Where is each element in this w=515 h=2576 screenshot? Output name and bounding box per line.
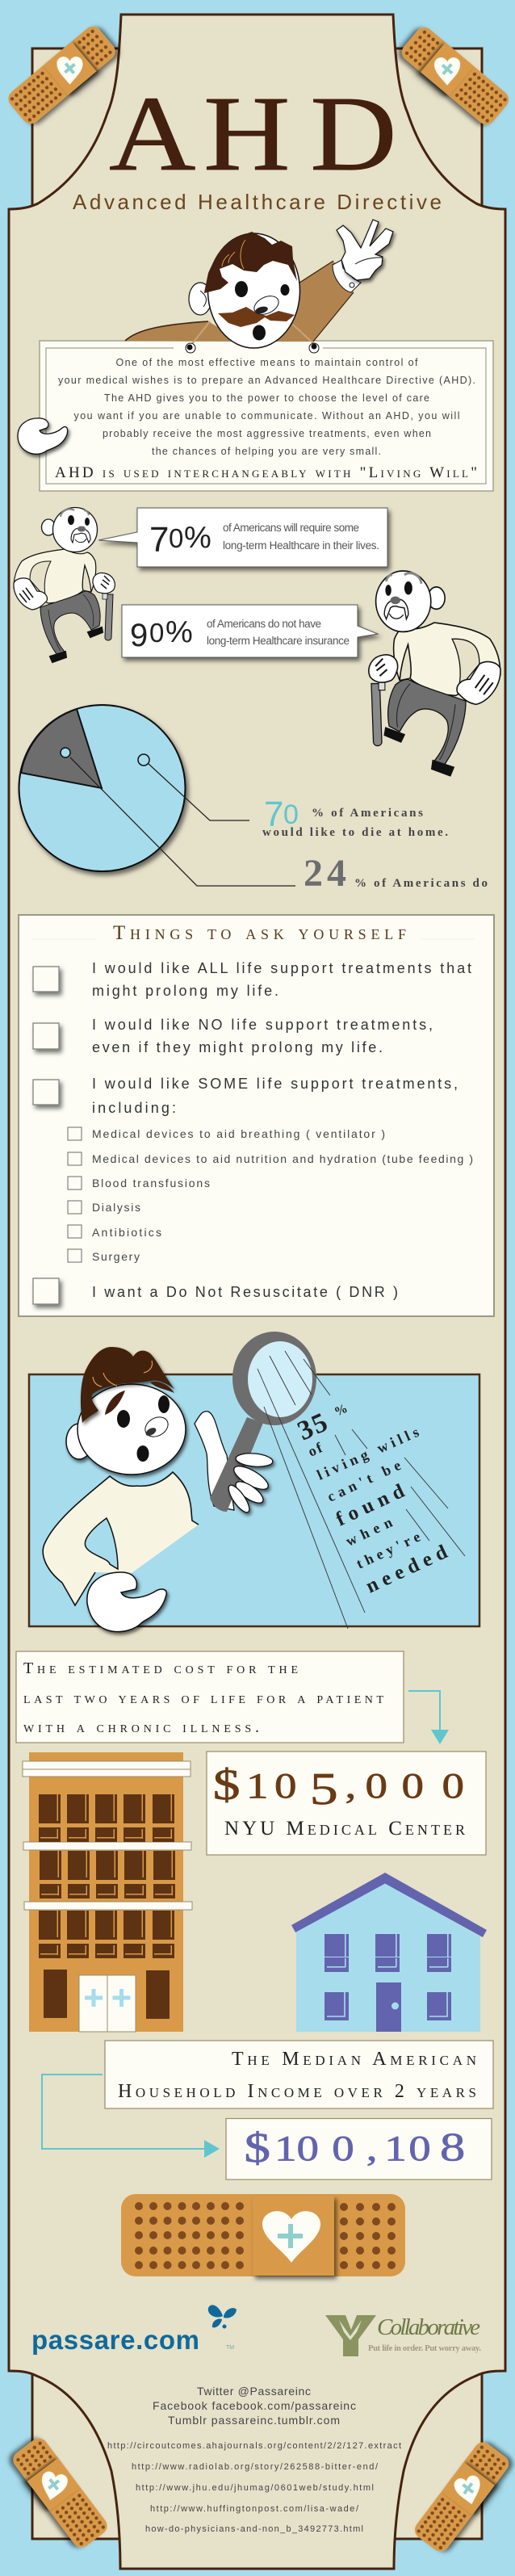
social links: Tumblr passareinc.tumblr.com bbox=[168, 2414, 340, 2427]
subtitle: Advanced Healthcare Directive bbox=[73, 190, 442, 214]
intro paragraph: the chances of helping you are very small. bbox=[152, 446, 381, 457]
logo: passare bbox=[31, 2305, 237, 2355]
callout: 70 percent bbox=[98, 508, 387, 567]
stat: 24 percent do: 24 bbox=[304, 852, 346, 895]
leader lines bbox=[70, 757, 295, 886]
rotated stat: 35 percent: living wills bbox=[314, 1424, 421, 1483]
eyebrows bbox=[105, 1382, 174, 1415]
intro paragraph: One of the most effective means to maintain control of bbox=[116, 357, 418, 368]
text box: estimated cost bbox=[16, 1651, 404, 1743]
sub-options bbox=[92, 1127, 473, 1263]
eyes bbox=[235, 281, 248, 297]
panel: intro card bbox=[40, 341, 493, 491]
windows row 3 bbox=[39, 1911, 174, 1958]
sources: http://www.jhu.edu/jhumag/0601web/study.html bbox=[136, 2483, 374, 2493]
caption: NYU Medical Center bbox=[224, 1818, 465, 1840]
main options: I would like NO life support treatments, bbox=[92, 1017, 433, 1033]
slice bbox=[21, 709, 102, 788]
title: AHD bbox=[109, 73, 397, 193]
illustration: old man right bbox=[369, 571, 500, 775]
rotated stat: 35 percent bbox=[293, 1402, 451, 1597]
box: 105,000 cost: 10 bbox=[246, 1766, 297, 1806]
box: 100,108 income: 100 bbox=[274, 2129, 354, 2168]
box: 100,108 income: 8 bbox=[440, 2125, 465, 2169]
intro paragraph: The AHD gives you to the power to choose the level of care bbox=[104, 392, 429, 404]
main options: I would like SOME life support treatments, bbox=[92, 1076, 458, 1092]
text box: estimated cost: last two years of life for a patient bbox=[23, 1689, 383, 1707]
sources bbox=[107, 2441, 401, 2534]
main options: I would like ALL life support treatments that bbox=[92, 960, 471, 976]
bandage pad bbox=[253, 2196, 334, 2276]
raised hand bbox=[337, 220, 393, 280]
illustration: hospital bbox=[23, 1752, 192, 2032]
stat: 24 percent do bbox=[304, 852, 488, 895]
rotated stat: 35 percent: 35 bbox=[293, 1407, 333, 1446]
text box: median income: The Median American bbox=[232, 2049, 476, 2070]
head bbox=[208, 233, 300, 348]
intro paragraph: probably receive the most aggressive treatments, even when bbox=[103, 428, 431, 439]
logo: Y collaborative: Put life in order. Put worry away. bbox=[368, 2344, 481, 2353]
stat 90%: % bbox=[165, 615, 193, 649]
stat text: of Americans will require some bbox=[223, 522, 359, 534]
sub-options: Blood transfusions bbox=[92, 1177, 210, 1189]
arm left bbox=[125, 321, 242, 342]
rails bbox=[23, 1761, 192, 1910]
text box: estimated cost: The estimated cost for the bbox=[23, 1659, 298, 1677]
stat text: long-term Healthcare insurance bbox=[207, 635, 350, 647]
icon: bandage bottom left bbox=[9, 2435, 111, 2552]
stat 70%: 0 bbox=[169, 523, 183, 553]
sources: http://www.radiolab.org/story/262588-bitter-end/ bbox=[132, 2462, 379, 2472]
social links: Facebook facebook.com/passareinc bbox=[153, 2399, 356, 2412]
logo: Y collaborative: Collaborative bbox=[377, 2314, 480, 2340]
sub-options: Antibiotics bbox=[92, 1226, 161, 1239]
magnifier rays bbox=[258, 1351, 465, 1629]
arm right bbox=[274, 261, 354, 342]
pie chart bbox=[19, 705, 186, 871]
stat text: of Americans do not have bbox=[207, 618, 321, 630]
rotated stat: 35 percent: % bbox=[333, 1402, 350, 1420]
doors bbox=[79, 1975, 107, 2032]
sub-options: Surgery bbox=[92, 1250, 140, 1263]
icon: large bandage bbox=[121, 2194, 405, 2276]
box: 105,000 cost: 5 bbox=[310, 1764, 338, 1814]
butterfly icon bbox=[208, 2305, 237, 2329]
box: 100,108 income: ,10 bbox=[366, 2129, 431, 2168]
nose bbox=[142, 1413, 171, 1441]
sub-options: Medical devices to aid breathing ( ventilator ) bbox=[92, 1127, 385, 1140]
box: 105,000 cost: ,000 bbox=[345, 1766, 464, 1806]
nose bbox=[251, 292, 282, 318]
social links bbox=[153, 2385, 356, 2427]
rotated stat: 35 percent: found bbox=[333, 1480, 408, 1530]
eyelets bbox=[186, 343, 195, 353]
arrow to income bbox=[42, 2075, 220, 2158]
magnifier handle bbox=[210, 1417, 263, 1512]
side panels bbox=[44, 1970, 67, 2018]
strings bbox=[191, 321, 313, 345]
main options bbox=[92, 960, 471, 1300]
illustration: old man left bbox=[14, 507, 115, 662]
arm up bbox=[195, 1412, 234, 1510]
mouth bbox=[253, 325, 266, 341]
ear bbox=[189, 283, 211, 315]
heading: Things to ask yourself bbox=[113, 922, 406, 944]
illustration: house bbox=[291, 1873, 487, 2032]
sources: http://circoutcomes.ahajournals.org/content/2/2/127.extract bbox=[107, 2441, 401, 2451]
text box: median income: Household Income over 2 years bbox=[118, 2081, 476, 2102]
hair bbox=[204, 232, 297, 293]
magnifier ring bbox=[232, 1332, 316, 1425]
mouth bbox=[137, 1445, 149, 1462]
stat text bbox=[207, 618, 350, 647]
stat 70%: % bbox=[184, 521, 211, 555]
sources: http://www.huffingtonpost.com/lisa-wade/ bbox=[150, 2504, 359, 2514]
fingers bbox=[225, 1452, 274, 1515]
box: 105,000 cost: $ bbox=[213, 1761, 241, 1809]
main options: including: bbox=[92, 1100, 176, 1116]
rotated stat: 35 percent: can't be bbox=[324, 1457, 404, 1505]
illustration: mustached man bbox=[125, 220, 393, 353]
rotated stat: 35 percent: of bbox=[305, 1439, 326, 1460]
sub-options: Medical devices to aid nutrition and hydration (tube feeding ) bbox=[92, 1152, 473, 1165]
stat: 70 percent die at home: 0 bbox=[283, 799, 299, 830]
sub-options: Dialysis bbox=[92, 1201, 140, 1214]
windows row 2 bbox=[40, 1851, 175, 1898]
stat: 24 percent do: % of Americans do bbox=[354, 877, 488, 890]
panel: things to ask yourself bbox=[19, 915, 494, 1316]
illustration: man with magnifier bbox=[43, 1332, 316, 1632]
box: 100,108 income bbox=[226, 2119, 492, 2180]
lower hand bbox=[87, 1572, 166, 1632]
intro paragraph: your medical wishes is to prepare an Advanced Healthcare Directive (AHD). bbox=[58, 375, 475, 386]
main options: I want a Do Not Resuscitate ( DNR ) bbox=[92, 1284, 398, 1300]
rotated stat: 35 percent: when bbox=[343, 1514, 395, 1550]
text box: estimated cost: with a chronic illness. bbox=[23, 1718, 259, 1736]
intro paragraph: you want if you are unable to communicate. Without an AHD, you will bbox=[74, 410, 460, 422]
stat text: long-term Healthcare in their lives. bbox=[223, 539, 379, 552]
stat: 70 percent die at home: would like to die at home. bbox=[262, 826, 448, 839]
hair bbox=[81, 1347, 174, 1423]
icon: left hand bbox=[18, 418, 68, 454]
panel: living wills blue bbox=[29, 1374, 479, 1626]
social links: Twitter @Passareinc bbox=[197, 2385, 311, 2398]
sources: how-do-physicians-and-non_b_3492773.html bbox=[145, 2524, 363, 2534]
logo: passare: TM bbox=[226, 2345, 234, 2351]
main options: even if they might prolong my life. bbox=[92, 1039, 383, 1055]
stat: 70 percent die at home: % of Americans bbox=[312, 807, 423, 820]
callout: 90 percent bbox=[122, 605, 378, 657]
intro paragraph bbox=[58, 357, 475, 457]
windows row 1 bbox=[39, 1794, 174, 1842]
stat: 70 percent die at home: 7 bbox=[264, 795, 283, 834]
main options: might prolong my life. bbox=[92, 983, 278, 999]
box: 100,108 income: $ bbox=[244, 2125, 270, 2171]
ear and head bbox=[66, 1384, 186, 1475]
logo: Y collaborative bbox=[325, 2314, 481, 2356]
icon: bandage top right bbox=[397, 23, 513, 129]
box: 105,000 cost bbox=[207, 1752, 486, 1855]
icon: bandage top left bbox=[5, 23, 119, 128]
logo: passare: passare.com bbox=[31, 2325, 199, 2355]
checkbox group bbox=[33, 967, 59, 1304]
cuff bbox=[333, 260, 361, 292]
heart bbox=[262, 2211, 320, 2263]
stat 70%: 7 bbox=[149, 520, 169, 560]
rotated stat: 35 percent: they're bbox=[354, 1529, 423, 1572]
rotated stat: 35 percent: needed bbox=[362, 1541, 451, 1597]
stat 90%: 9 bbox=[130, 618, 148, 653]
sweater bbox=[43, 1472, 199, 1605]
text box: median income bbox=[105, 2041, 493, 2108]
moustache bbox=[218, 307, 295, 327]
small checkboxes bbox=[68, 1127, 82, 1262]
stat 90%: 0 bbox=[149, 618, 164, 648]
stat: 70 percent die at home bbox=[262, 795, 448, 839]
living will line: AHD is used interchangeably with "Living Will" bbox=[55, 464, 477, 481]
icon: bandage bottom right bbox=[412, 2439, 513, 2556]
stat text bbox=[223, 522, 379, 552]
arrow to cost bbox=[408, 1691, 449, 1744]
eyes bbox=[117, 1410, 130, 1428]
